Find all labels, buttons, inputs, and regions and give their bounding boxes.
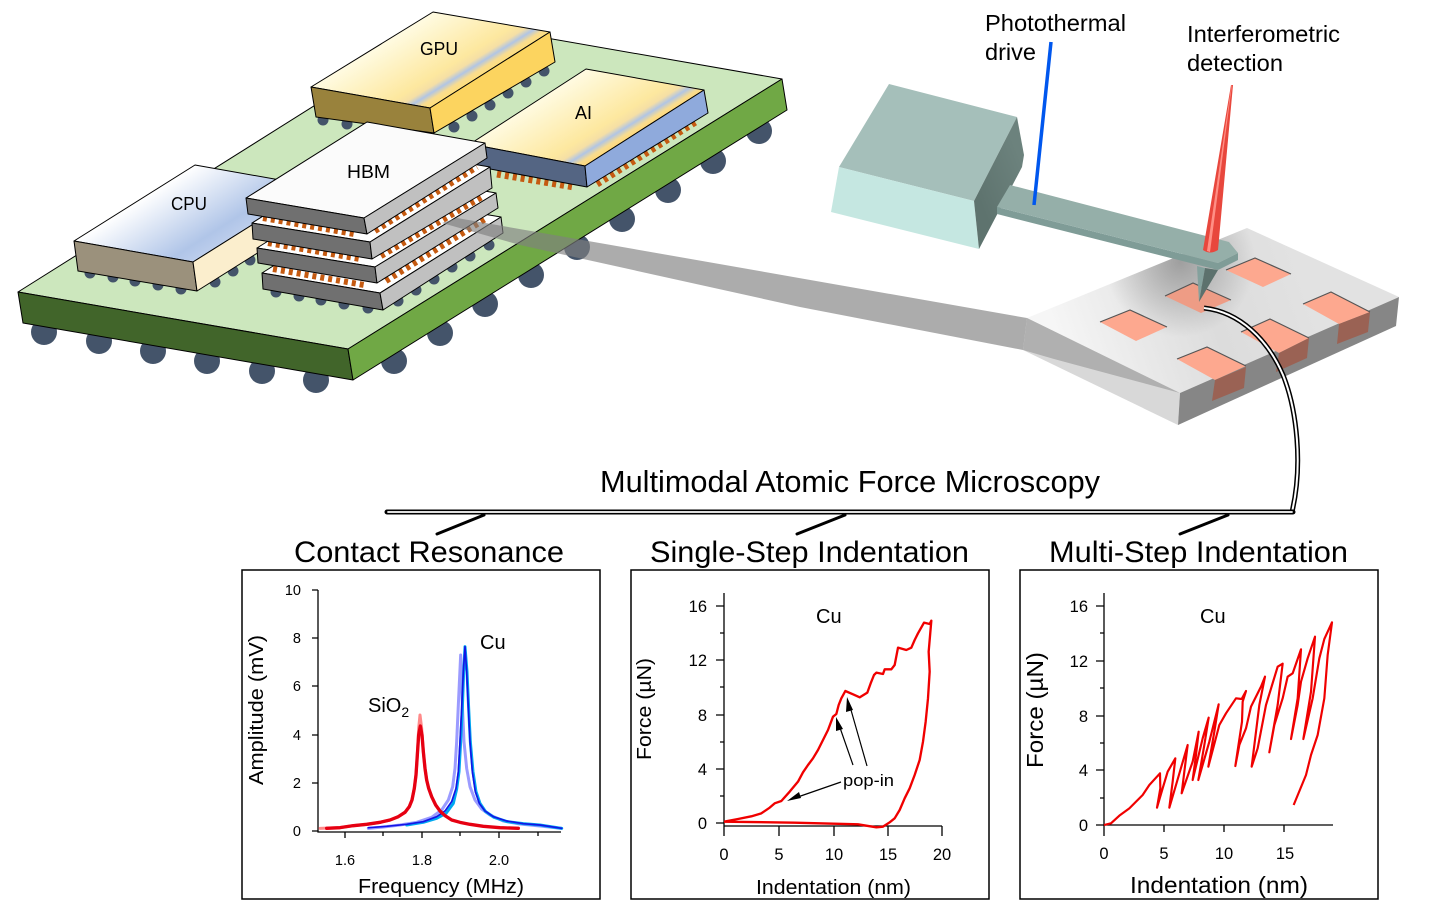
x tick labels: 5	[1159, 845, 1169, 863]
x tick labels	[1099, 845, 1294, 863]
y tick labels: 0	[1079, 817, 1088, 835]
HBM stack	[246, 122, 503, 310]
y tick labels	[285, 583, 301, 840]
axis title x: Indentation (nm)	[1130, 872, 1308, 898]
pop-in annotation: pop-in	[843, 771, 894, 790]
x tick labels: 2.0	[489, 853, 509, 869]
x tick labels	[719, 846, 951, 864]
y tick labels	[689, 598, 707, 833]
board solder balls	[31, 118, 772, 393]
CPU chip	[74, 165, 318, 291]
label: photothermal drive: drive	[985, 39, 1036, 65]
y tick labels: 12	[1070, 653, 1088, 671]
x tick labels: 15	[879, 846, 897, 864]
x tick labels: 1.8	[412, 853, 432, 869]
x tick labels: 1.6	[335, 853, 355, 869]
x tick labels	[335, 853, 509, 869]
y tick labels	[1070, 598, 1088, 835]
label: interferometric detection: Interferometric	[1187, 21, 1340, 47]
x tick labels: 5	[774, 846, 784, 864]
label SiO2: SiO	[368, 695, 401, 717]
AFM cantilever	[831, 84, 1238, 302]
cantilever beam	[997, 185, 1238, 263]
AI chip	[470, 69, 708, 187]
axis title x: Indentation (nm)	[756, 877, 911, 899]
panel: single-step indentation chart	[631, 570, 989, 899]
HBM die 1	[246, 122, 487, 234]
AI chip: AI	[575, 103, 592, 123]
blue photothermal laser	[1034, 42, 1051, 205]
label Cu: Cu	[480, 632, 506, 654]
x tick labels: 15	[1276, 845, 1294, 863]
y tick labels: 4	[293, 728, 301, 744]
y tick labels: 8	[698, 707, 707, 725]
GPU chip	[311, 12, 555, 133]
pop-in annotation	[787, 697, 894, 801]
axes	[312, 590, 561, 838]
axis title x: Frequency (MHz)	[358, 876, 524, 898]
heading: single-step indentation: Single-Step Indentation	[650, 536, 969, 569]
HBM die 3	[257, 172, 498, 283]
label Cu: Cu	[1200, 606, 1226, 628]
y tick labels: 6	[293, 679, 301, 695]
sawtooth force curve	[1104, 622, 1332, 825]
holder end face	[974, 117, 1024, 249]
red interferometric laser	[1203, 85, 1233, 252]
axis title y: Force (µN)	[634, 658, 656, 760]
GPU chip: GPU	[420, 39, 458, 59]
label Cu: Cu	[816, 606, 842, 628]
cantilever underside	[997, 207, 1238, 270]
connector wire from sample	[1204, 308, 1298, 512]
holder top face	[839, 84, 1017, 201]
holder front face	[831, 167, 979, 249]
sample with copper pads	[1023, 228, 1399, 425]
sample left face	[1023, 318, 1180, 425]
x tick labels: 0	[1099, 845, 1109, 863]
x tick labels: 10	[825, 846, 843, 864]
label: photothermal drive	[985, 10, 1126, 65]
x tick labels: 10	[1215, 845, 1233, 863]
y tick labels: 16	[1070, 598, 1088, 616]
y tick labels: 4	[698, 761, 707, 779]
grey zoom projection beam	[442, 218, 1180, 393]
axis title y: Force (µN)	[1022, 652, 1048, 768]
main heading: Multimodal Atomic Force Microscopy	[600, 464, 1100, 499]
y tick labels: 4	[1079, 762, 1088, 780]
y tick labels: 8	[293, 631, 301, 647]
x tick labels: 20	[933, 846, 951, 864]
label: interferometric detection: detection	[1187, 50, 1283, 76]
y tick labels: 12	[689, 652, 707, 670]
chip solder balls	[84, 66, 550, 314]
y tick labels: 0	[698, 815, 707, 833]
y tick labels: 0	[293, 824, 301, 840]
HBM die 2	[252, 147, 492, 259]
sample right face	[1178, 297, 1399, 425]
y tick labels: 8	[1079, 708, 1088, 726]
HBM die 1: HBM	[347, 162, 390, 182]
label SiO2: 2	[401, 704, 409, 720]
probe tip	[1197, 266, 1218, 302]
y tick labels: 2	[293, 776, 301, 792]
heading: contact resonance: Contact Resonance	[294, 536, 564, 569]
heading: multi-step indentation: Multi-Step Indentation	[1049, 536, 1348, 569]
label: interferometric detection	[1187, 21, 1340, 76]
HBM die 4	[262, 197, 503, 310]
horizontal branch bar	[387, 512, 1293, 534]
axes	[1096, 593, 1333, 836]
y tick labels: 16	[689, 598, 707, 616]
data curves	[320, 647, 562, 828]
axis title y: Amplitude (mV)	[246, 635, 268, 785]
green circuit board	[18, 21, 787, 380]
y tick labels: 10	[285, 583, 301, 599]
CPU chip: CPU	[171, 194, 207, 214]
sample shading	[1027, 228, 1399, 393]
axes	[716, 593, 942, 836]
force curve	[724, 621, 931, 827]
copper pads	[1100, 258, 1370, 401]
chip package illustration	[18, 12, 787, 393]
x tick labels: 0	[719, 846, 729, 864]
panel: multi-step indentation chart	[1020, 570, 1378, 899]
label: photothermal drive: Photothermal	[985, 10, 1126, 36]
panel: contact resonance chart	[242, 570, 600, 899]
sample top face	[1027, 228, 1399, 393]
